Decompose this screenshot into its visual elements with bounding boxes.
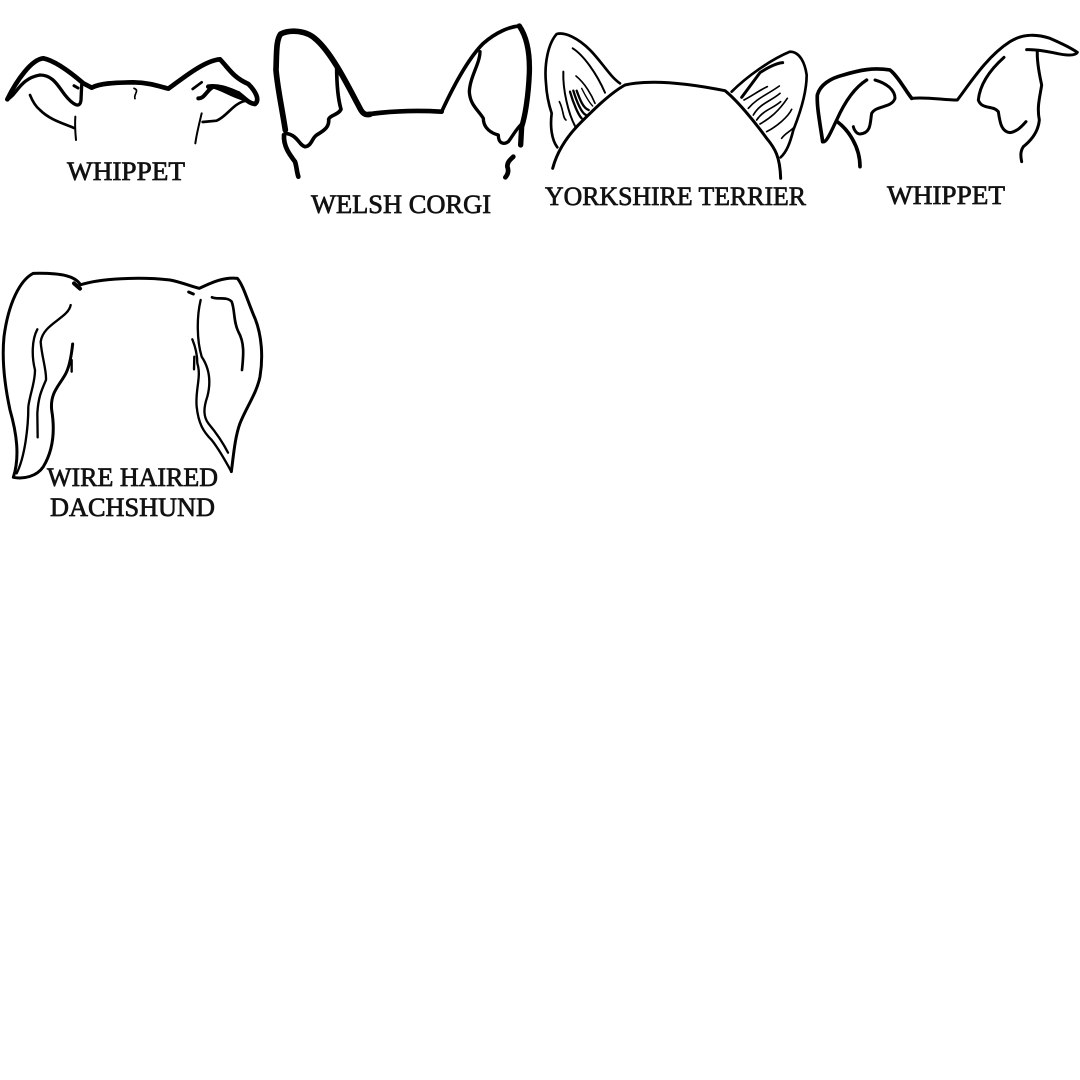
label: wire haired dachshund: WIRE HAIRED [47,463,218,492]
icon: welsh corgi ears outline [276,26,529,177]
label: whippet: WHIPPET [67,157,185,186]
panel: wire haired dachshund ears: DACHSHUND [50,493,215,522]
icon: yorkshire terrier ears outline [546,34,807,178]
icon: whippet ears outline [7,58,257,143]
label: yorkshire terrier: YORKSHIRE TERRIER [545,182,807,211]
panel: welsh corgi ears [276,26,529,219]
panel: yorkshire terrier ears [545,34,807,211]
panel: whippet ears, second [817,35,1077,210]
panel: whippet ears, first [7,58,257,186]
label: whippet: WHIPPET [887,181,1005,210]
panel: wire haired dachshund ears [3,273,262,522]
label: welsh corgi: WELSH CORGI [311,190,491,219]
icon: wire haired dachshund ears outline [3,273,262,478]
icon: whippet ears outline, folded [817,35,1077,167]
